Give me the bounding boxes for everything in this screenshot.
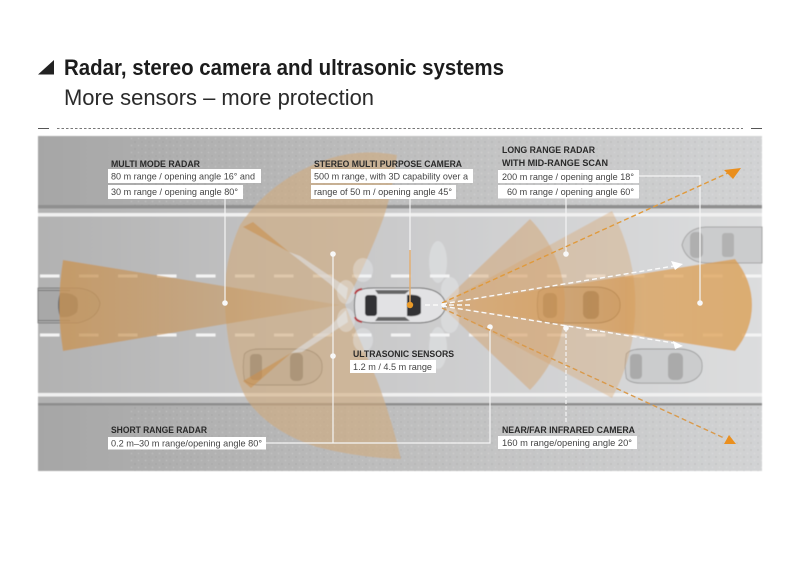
lane markings <box>40 276 762 335</box>
label: ultrasonic sensors: 1.2 m / 4.5 m range <box>353 362 432 372</box>
road surface <box>38 206 762 405</box>
car: upper right <box>682 227 762 263</box>
icon: heading triangle <box>38 60 54 74</box>
leader line: mid range scan <box>563 198 569 257</box>
label: stereo camera: range of 50 m / opening angle 45° <box>314 187 452 197</box>
arrow: lower white <box>442 306 683 349</box>
label: short range radar <box>108 425 266 450</box>
road scene artwork <box>38 136 762 471</box>
title block <box>38 55 504 110</box>
label: stereo camera: STEREO MULTI PURPOSE CAMERA <box>314 159 462 169</box>
label: multi mode radar: MULTI MODE RADAR <box>111 159 200 169</box>
label: near far infrared camera: 160 m range/opening angle 20° <box>502 438 632 448</box>
label: ultrasonic sensors <box>350 349 454 373</box>
upper pavement <box>38 136 762 206</box>
mid range radar cone <box>440 211 635 398</box>
subheading: More sensors – more protection <box>64 85 374 110</box>
arrow: upper white <box>442 261 683 304</box>
label: long range radar: LONG RANGE RADAR <box>502 145 595 155</box>
label: near far infrared camera <box>498 425 637 449</box>
label: ultrasonic sensors: ULTRASONIC SENSORS <box>353 349 454 359</box>
leader line: short range radar <box>266 251 493 443</box>
ego car <box>354 288 445 323</box>
label: long range radar <box>498 145 639 198</box>
car: left lane <box>243 349 322 385</box>
rear radar cone <box>59 260 340 351</box>
leader line: multi mode radar <box>222 199 228 306</box>
label: stereo camera <box>311 159 473 199</box>
label: near far infrared camera: NEAR/FAR INFRARED CAMERA <box>502 425 635 435</box>
car: middle <box>537 287 620 323</box>
panel: road scene <box>38 136 762 471</box>
arrow: upper long range orange <box>442 168 741 303</box>
wedge: pale rear lower <box>291 310 348 353</box>
label: multi mode radar: 30 m range / opening angle 80° <box>111 187 238 197</box>
label: multi mode radar: 80 m range / opening angle 16° and <box>111 172 255 182</box>
label: long range radar: 200 m range / opening angle 18° <box>502 172 634 182</box>
heading: Radar, stereo camera and ultrasonic systems <box>64 55 504 80</box>
arrow: lower infrared orange <box>442 308 736 444</box>
car: lower right <box>625 349 702 383</box>
ultrasonic sensor fields <box>337 241 459 369</box>
long range radar cone <box>440 259 752 351</box>
arrow: centre white <box>425 304 470 306</box>
leader line: stereo camera <box>407 199 413 308</box>
label: short range radar: 0.2 m–30 m range/opening angle 80° <box>111 438 262 448</box>
leader line: long range radar <box>639 176 703 306</box>
wedge: pale rear upper <box>289 252 348 300</box>
label: long range radar: WITH MID-RANGE SCAN <box>502 158 608 168</box>
leader line: infrared camera <box>563 325 569 424</box>
wedge: rear corner radar upper <box>243 222 289 252</box>
label: stereo camera: 500 m range, with 3D capability over a <box>314 172 469 182</box>
short range radar fan <box>225 152 401 459</box>
cars on road <box>38 227 762 385</box>
wedge: rear corner radar lower <box>243 353 291 388</box>
lower pavement <box>38 404 762 471</box>
car: rear <box>38 288 100 323</box>
infrared cone <box>440 219 565 390</box>
label: long range radar: 60 m range / opening angle 60° <box>507 187 634 197</box>
label: short range radar: SHORT RANGE RADAR <box>111 425 207 435</box>
label: multi mode radar <box>108 159 261 199</box>
